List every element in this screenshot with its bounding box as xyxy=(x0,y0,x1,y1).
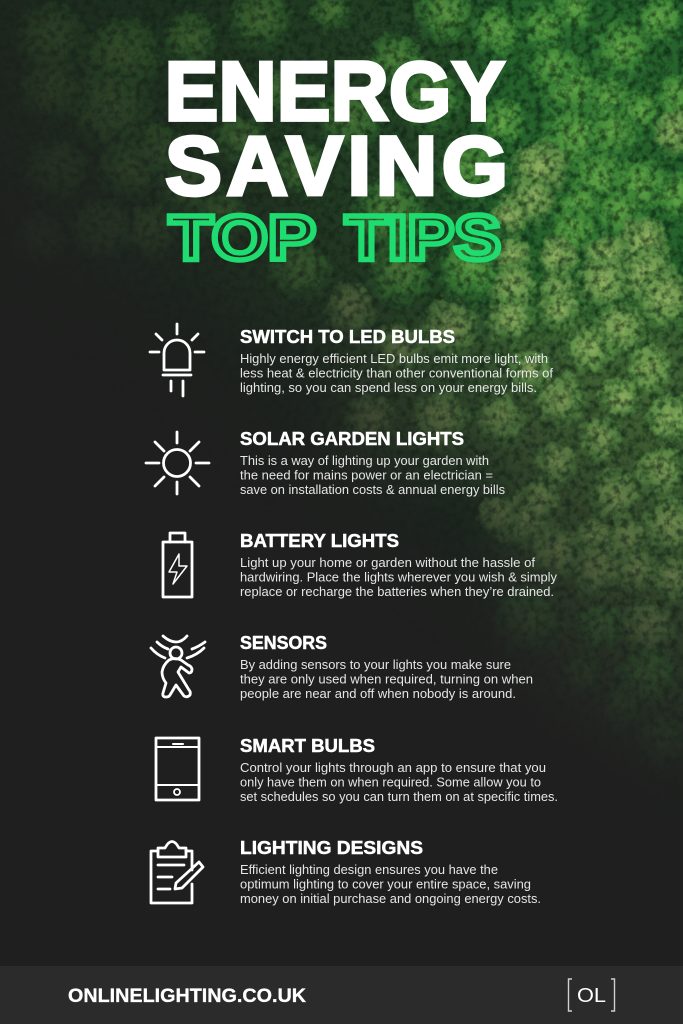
website address: ONLINELIGHTING.CO.UK xyxy=(68,985,306,1007)
description: optimum lighting to cover your entire space, saving xyxy=(240,876,531,892)
description: the need for mains power or an electrician = xyxy=(240,468,493,482)
description xyxy=(240,555,557,599)
description: less heat & electricity than other conventional forms of xyxy=(240,366,553,380)
icon: motion sensor figure xyxy=(151,636,205,697)
description: people are near and off when nobody is around. xyxy=(240,686,516,701)
description xyxy=(240,351,553,395)
icon: LED bulb xyxy=(150,324,204,396)
description xyxy=(240,657,533,701)
heading: SMART BULBS xyxy=(240,736,375,756)
description xyxy=(240,862,541,906)
logo: OL in brackets: OL xyxy=(577,985,606,1007)
heading: LIGHTING DESIGNS xyxy=(240,838,423,858)
description: money on initial purchase and ongoing energy costs. xyxy=(240,891,541,906)
tip: battery lights xyxy=(163,531,557,599)
description: Efficient lighting design ensures you have the xyxy=(240,862,498,877)
description: By adding sensors to your lights you make sure xyxy=(240,657,511,672)
tip: sensors xyxy=(151,633,533,701)
description: save on installation costs & annual energy bills xyxy=(240,482,505,497)
description: set schedules so you can turn them on at specific times. xyxy=(240,789,558,804)
title: TOP TIPS: TIPS xyxy=(345,204,501,274)
tip: lighting designs xyxy=(151,838,541,906)
title: ENERGY SAVING: ENERGY xyxy=(165,45,505,138)
title: ENERGY SAVING xyxy=(165,45,508,213)
tip: switch to LED bulbs xyxy=(150,324,553,396)
icon: battery xyxy=(163,533,192,597)
tip: smart bulbs xyxy=(156,736,558,804)
description: lighting, so you can spend less on your energy bills. xyxy=(240,380,537,395)
tip: solar garden lights xyxy=(146,429,505,497)
description: Light up your home or garden without the hassle of xyxy=(240,555,535,570)
description: only have them on when required. Some allow you to xyxy=(240,774,541,790)
description xyxy=(240,453,505,497)
description: Highly energy efficient LED bulbs emit more light, with xyxy=(240,351,548,366)
logo: OL in brackets xyxy=(568,979,614,1011)
footer bar xyxy=(0,966,683,1024)
heading: SWITCH TO LED BULBS xyxy=(240,327,455,347)
heading: SENSORS xyxy=(240,633,327,653)
description: replace or recharge the batteries when they’re drained. xyxy=(240,584,554,599)
title: TOP TIPS xyxy=(169,204,501,274)
description: This is a way of lighting up your garden with xyxy=(240,453,489,468)
icon: clipboard and pencil xyxy=(151,842,203,903)
heading: SOLAR GARDEN LIGHTS xyxy=(240,429,464,449)
icon: sun xyxy=(146,432,209,494)
description: hardwiring. Place the lights wherever you wish & simply xyxy=(240,570,557,584)
description: they are only used when required, turning on when xyxy=(240,672,533,686)
title: ENERGY SAVING: SAVING xyxy=(165,119,508,213)
icon: tablet xyxy=(156,738,199,800)
description: Control your lights through an app to ensure that you xyxy=(240,760,546,775)
title: TOP TIPS: TOP xyxy=(169,204,316,274)
heading: BATTERY LIGHTS xyxy=(240,531,399,551)
description xyxy=(240,760,558,804)
